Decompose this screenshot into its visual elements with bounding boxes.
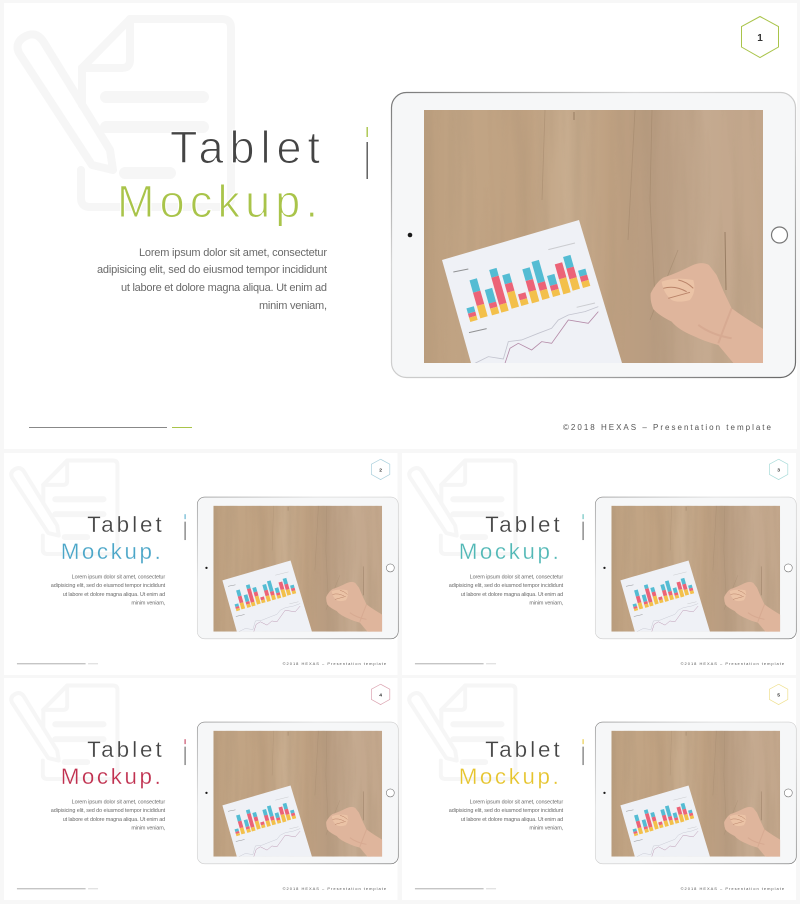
body text: ut labore et dolore magna aliqua. Ut enim ad	[63, 592, 165, 598]
accent bar dark	[366, 142, 368, 179]
footer text: ©2018 HEXAS – Presentation template	[283, 661, 387, 666]
footer text: ©2018 HEXAS – Presentation template	[681, 886, 785, 891]
title: Tablet: Tablet	[170, 122, 320, 173]
background icon	[11, 685, 117, 779]
body text: ut labore et dolore magna aliqua. Ut enim ad	[461, 592, 563, 598]
footer text: ©2018 HEXAS – Presentation template	[563, 423, 772, 432]
accent bars	[184, 514, 187, 540]
title: Mockup: Mockup.	[459, 764, 559, 789]
page number hexagon	[769, 459, 788, 480]
body text: Lorem ipsum dolor sit amet, consectetur	[470, 799, 563, 805]
body text: adipisicing elit, sed do eiusmod tempor incididunt	[449, 808, 564, 814]
footer rule	[17, 887, 98, 890]
accent bars	[582, 514, 585, 540]
tablet mockup	[595, 722, 796, 864]
body text: minim veniam,	[259, 300, 327, 312]
title: Tablet: Tablet	[87, 737, 162, 762]
body text: ut labore et dolore magna aliqua. Ut enim ad	[63, 817, 165, 823]
accent bars	[184, 739, 187, 765]
page number hexagon: 5	[777, 692, 780, 698]
body text	[449, 574, 564, 607]
body text: minim veniam,	[529, 601, 564, 607]
footer rule	[415, 662, 496, 665]
body text: ut labore et dolore magna aliqua. Ut enim ad	[121, 282, 327, 294]
slide 2: blue	[4, 453, 398, 675]
title: Mockup: Mockup.	[61, 764, 161, 789]
body text: adipisicing elit, sed do eiusmod tempor incididunt	[449, 583, 564, 589]
page number hexagon: 1	[757, 33, 763, 44]
footer rule	[29, 427, 192, 428]
slide 1: green main	[4, 3, 797, 449]
title: Mockup: Mockup.	[117, 176, 318, 227]
body text	[449, 799, 564, 832]
body text: ut labore et dolore magna aliqua. Ut enim ad	[461, 817, 563, 823]
body text: adipisicing elit, sed do eiusmod tempor incididunt	[97, 264, 327, 276]
page number hexagon: 2	[379, 467, 382, 473]
footer text: ©2018 HEXAS – Presentation template	[283, 886, 387, 891]
body text: minim veniam,	[131, 826, 166, 832]
body text	[97, 247, 327, 312]
background icon	[409, 685, 515, 779]
body text: Lorem ipsum dolor sit amet, consectetur	[72, 799, 165, 805]
body text: minim veniam,	[131, 601, 166, 607]
title: Tablet: Tablet	[485, 737, 560, 762]
body text: Lorem ipsum dolor sit amet, consectetur	[72, 574, 165, 580]
accent bar green	[366, 127, 368, 137]
title: Tablet: Tablet	[87, 512, 162, 537]
body text: minim veniam,	[529, 826, 564, 832]
page number hexagon	[769, 684, 788, 705]
page number hexagon	[742, 16, 778, 58]
page number hexagon	[371, 459, 390, 480]
body text: adipisicing elit, sed do eiusmod tempor incididunt	[51, 808, 166, 814]
body text	[51, 799, 166, 832]
tablet mockup	[197, 497, 398, 639]
title: Tablet: Tablet	[485, 512, 560, 537]
slide 4: red	[4, 678, 398, 900]
page number hexagon	[371, 684, 390, 705]
body text: adipisicing elit, sed do eiusmod tempor incididunt	[51, 583, 166, 589]
background icon	[11, 460, 117, 554]
background icon: document and pencil	[18, 19, 231, 207]
tablet mockup	[595, 497, 796, 639]
background icon	[409, 460, 515, 554]
accent bars	[582, 739, 585, 765]
page number hexagon: 3	[777, 467, 780, 473]
slide 5: yellow	[402, 678, 796, 900]
body text: Lorem ipsum dolor sit amet, consectetur	[139, 247, 327, 259]
footer rule	[17, 662, 98, 665]
slide 3: teal	[402, 453, 796, 675]
title: Mockup: Mockup.	[459, 539, 559, 564]
page number hexagon: 4	[379, 692, 382, 698]
body text: Lorem ipsum dolor sit amet, consectetur	[470, 574, 563, 580]
title: Mockup: Mockup.	[61, 539, 161, 564]
body text	[51, 574, 166, 607]
footer text: ©2018 HEXAS – Presentation template	[681, 661, 785, 666]
tablet mockup	[197, 722, 398, 864]
footer rule	[415, 887, 496, 890]
tablet mockup with photo	[392, 92, 796, 378]
